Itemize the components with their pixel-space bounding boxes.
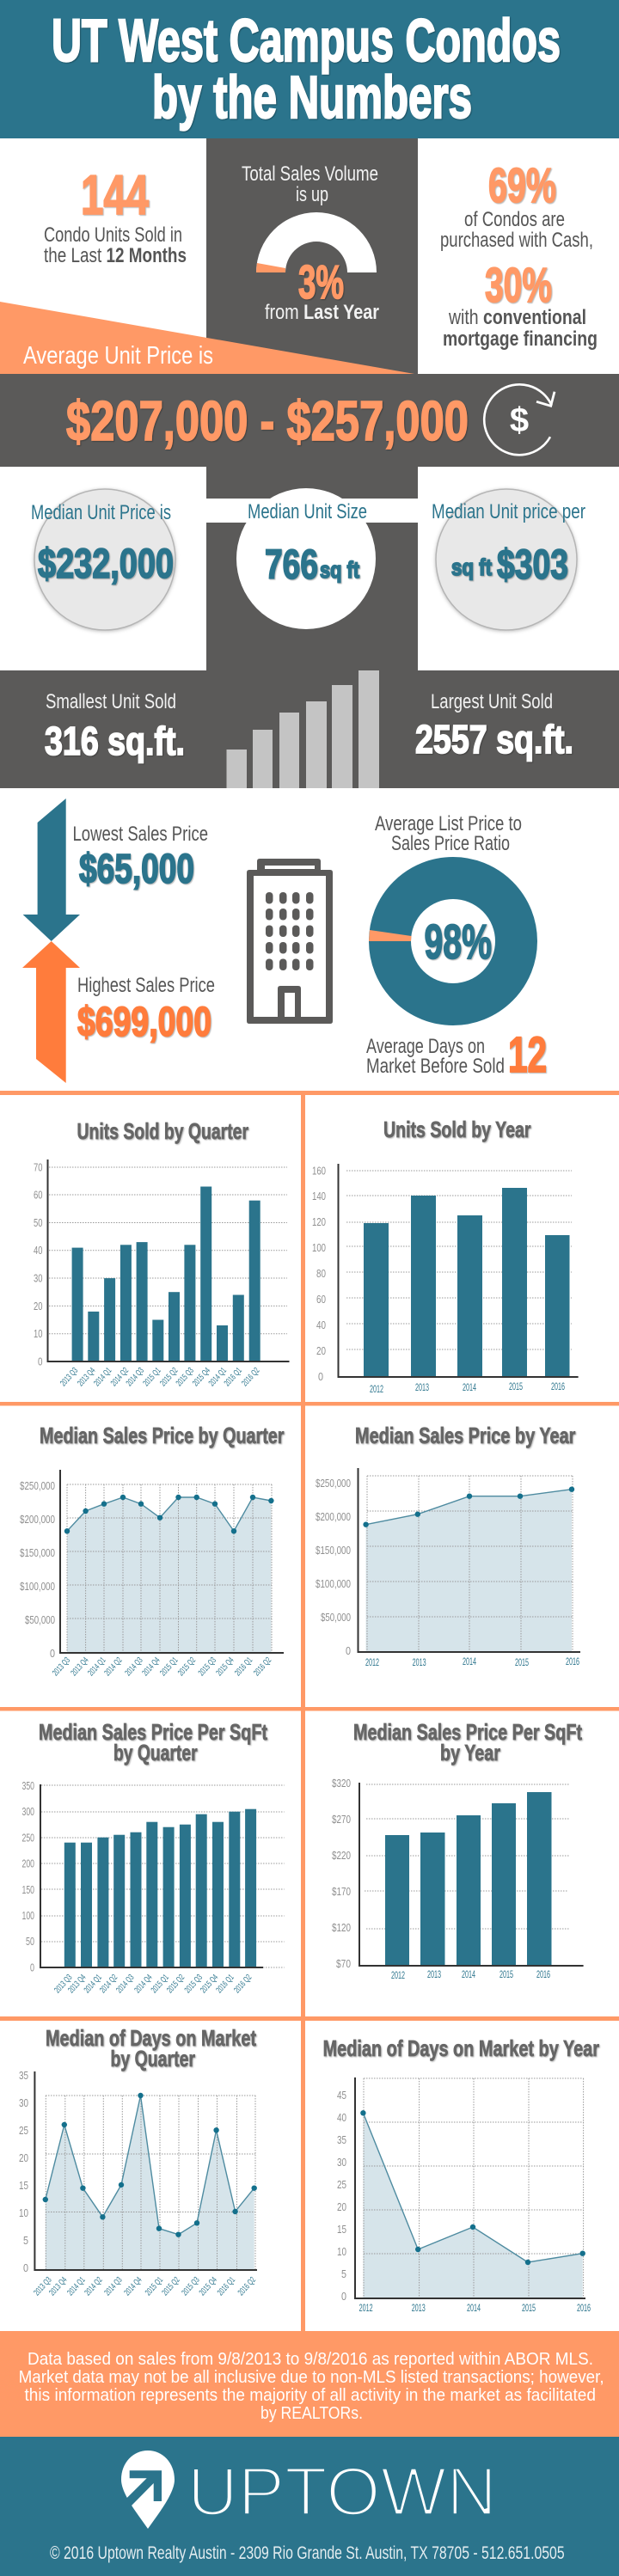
x axis labels: 2012 — [365, 1656, 379, 1668]
panel: smallest and largest unit band: 316 sq.ft. — [45, 719, 185, 763]
y axis labels: 20 — [34, 1300, 43, 1312]
x axis labels: 2014 — [467, 2302, 481, 2314]
x axis labels: 2015 Q1 — [158, 1655, 181, 1678]
x axis labels: 2014 Q1 — [92, 1366, 113, 1388]
x axis labels: 2016 Q1 — [233, 1655, 254, 1678]
x axis labels: 2014 Q4 — [133, 1973, 155, 1995]
x axis labels: 2016 Q1 — [216, 2275, 237, 2298]
y axis labels: 120 — [312, 1215, 326, 1228]
y axis labels: 250 — [22, 1831, 34, 1845]
panel: median unit price — [31, 489, 175, 630]
y axis labels: 100 — [312, 1241, 326, 1254]
y axis labels: 15 — [19, 2179, 28, 2192]
y axis labels: 0 — [30, 1961, 34, 1973]
y axis labels: 40 — [316, 1319, 326, 1331]
x axis labels: 2016 Q2 — [240, 1366, 262, 1388]
chart: median price per sqft by quarter — [22, 1719, 285, 1995]
x axis labels: 2016 — [577, 2302, 591, 2314]
x axis labels: 2013 Q3 — [33, 2275, 54, 2298]
y axis labels: 50 — [34, 1216, 43, 1229]
x axis labels: 2015 Q1 — [144, 2275, 165, 2298]
x axis labels: 2015 Q1 — [150, 1973, 171, 1995]
icon: rising bars — [227, 670, 379, 788]
x axis labels: 2015 — [515, 1656, 529, 1668]
x axis labels: 2013 Q4 — [76, 1366, 98, 1388]
y axis labels: $150,000 — [20, 1546, 55, 1559]
area fill — [366, 1490, 572, 1652]
x axis labels: 2014 Q4 — [123, 2275, 144, 2298]
x axis labels: 2013 — [413, 1656, 426, 1668]
area fill — [363, 2113, 583, 2298]
x axis labels: 2014 Q1 — [83, 1973, 104, 1995]
y axis labels: 0 — [23, 2261, 28, 2274]
y axis labels: 10 — [337, 2245, 346, 2258]
panel: list to sales price ratio: 12 — [508, 1027, 547, 1083]
x axis labels — [51, 1655, 273, 1678]
y axis labels — [337, 2089, 346, 2303]
y axis labels: $250,000 — [316, 1477, 351, 1490]
panel: units sold stat: Condo Units Sold in — [44, 223, 182, 247]
data points — [360, 2110, 585, 2265]
panel: list to sales price ratio: Average Days on — [366, 1035, 485, 1058]
chart title: by Quarter — [110, 2046, 195, 2071]
arrow: highest sales price: $699,000 — [77, 1000, 211, 1045]
panel: total sales volume gauge: 3% — [298, 255, 344, 309]
y axis labels: 10 — [34, 1327, 43, 1340]
x axis labels: 2016 — [551, 1380, 565, 1392]
panel: list to sales price ratio — [366, 812, 547, 1083]
x axis labels: 2015 Q4 — [198, 2275, 219, 2298]
panel: median unit price: $232,000 — [38, 542, 174, 587]
x axis labels: 2014 — [463, 1655, 476, 1667]
arrow: lowest sales price — [23, 798, 208, 941]
chart title: Units Sold by Year — [383, 1117, 531, 1142]
panel: data disclaimer: by REALTORs. — [260, 2403, 363, 2423]
y axis labels — [34, 1160, 43, 1368]
x axis labels — [58, 1366, 262, 1388]
panel: median unit size: sq ft — [320, 557, 359, 583]
y axis labels: $250,000 — [20, 1479, 55, 1492]
chart: median days on market by quarter — [19, 2025, 258, 2298]
x axis labels: 2015 Q2 — [158, 1366, 181, 1388]
panel: cash and mortgage stats: 30% — [485, 258, 552, 313]
y axis labels: $100,000 — [20, 1580, 55, 1593]
x axis labels: 2013 Q3 — [58, 1366, 80, 1388]
x axis labels: 2014 Q2 — [103, 1655, 125, 1678]
y axis labels: $170 — [332, 1885, 351, 1898]
panel: average price band — [0, 374, 619, 467]
y axis labels: 160 — [312, 1164, 326, 1178]
x axis labels: 2014 Q3 — [103, 2275, 125, 2298]
x axis labels — [391, 1968, 550, 1981]
x axis labels: 2013 Q3 — [51, 1655, 72, 1678]
x axis labels: 2015 Q3 — [197, 1655, 218, 1678]
panel: list to sales price ratio: Sales Price Ratio — [391, 832, 510, 855]
chart: median price per sqft by year — [332, 1719, 584, 1981]
y axis labels: 20 — [316, 1344, 326, 1357]
y axis labels: 200 — [22, 1857, 34, 1870]
arrow: highest sales price — [22, 941, 215, 1083]
line — [363, 2113, 583, 2262]
gauge — [256, 212, 377, 272]
x axis labels: 2012 — [370, 1383, 383, 1395]
data points — [43, 2093, 257, 2237]
y axis labels: 25 — [337, 2178, 346, 2191]
panel: median unit size: 766 — [265, 542, 318, 588]
x axis labels: 2014 Q2 — [98, 1973, 120, 1995]
area fill — [67, 1497, 271, 1653]
panel: total sales volume gauge: from Last Year — [265, 301, 379, 324]
line — [67, 1497, 271, 1531]
y axis labels: 5 — [23, 2234, 28, 2247]
logo: uptown pin — [121, 2451, 175, 2529]
x axis labels: 2016 Q2 — [232, 1973, 254, 1995]
x axis labels: 2015 — [499, 1968, 513, 1980]
chart title: Units Sold by Quarter — [77, 1118, 248, 1144]
panel: units sold stat — [44, 163, 187, 267]
y axis labels: 50 — [26, 1935, 34, 1948]
x axis labels — [365, 1655, 579, 1668]
x axis labels: 2013 Q4 — [47, 2275, 70, 2298]
chart title — [39, 1719, 267, 1765]
title — [52, 7, 561, 131]
panel: cash and mortgage stats — [440, 158, 598, 351]
icon: dollar refresh: $ — [510, 401, 529, 439]
x axis labels: 2014 Q1 — [86, 1655, 108, 1678]
orange wedge with average unit price label — [0, 302, 414, 374]
chart: units sold by quarter — [34, 1118, 289, 1388]
y axis labels: $150,000 — [316, 1544, 351, 1557]
panel: smallest and largest unit band: Smallest Unit Sold — [46, 690, 176, 713]
panel: total sales volume gauge — [242, 162, 379, 324]
y axis labels: 20 — [337, 2200, 346, 2213]
y axis labels: 5 — [341, 2267, 346, 2280]
line — [366, 1490, 572, 1525]
y axis labels: $100,000 — [316, 1577, 351, 1590]
x axis labels: 2014 — [462, 1968, 475, 1980]
y axis labels — [332, 1777, 351, 1970]
panel: median unit size — [236, 488, 376, 629]
chart title: by Year — [440, 1740, 500, 1765]
x axis labels: 2014 Q1 — [66, 2275, 88, 2298]
white strip behind median unit size — [206, 499, 418, 523]
chart dividers — [0, 1091, 619, 2331]
panel: median price per sq ft: sq ft — [451, 554, 492, 580]
y axis labels: 0 — [318, 1370, 323, 1383]
x axis labels — [52, 1973, 254, 1995]
x axis labels: 2014 Q3 — [124, 1655, 145, 1678]
y axis labels: $50,000 — [321, 1611, 351, 1624]
y axis labels: 0 — [346, 1644, 351, 1657]
panel: median unit size: Median Unit Size — [248, 500, 367, 523]
panel: smallest and largest unit band — [0, 670, 619, 788]
y axis labels: 35 — [19, 2069, 28, 2082]
x axis labels: 2013 Q4 — [66, 1973, 89, 1995]
bars — [364, 1188, 569, 1376]
x axis labels: 2015 Q4 — [199, 1973, 220, 1995]
x axis labels: 2013 Q3 — [52, 1973, 75, 1995]
panel: cash and mortgage stats: with conventional — [448, 306, 586, 329]
x axis labels: 2014 Q2 — [83, 2275, 105, 2298]
y axis labels: 0 — [341, 2290, 346, 2303]
x axis labels: 2012 — [391, 1969, 405, 1981]
area fill — [46, 2096, 254, 2270]
chart title: Median Sales Price Per SqFt — [39, 1719, 267, 1745]
bars — [72, 1186, 260, 1361]
chart title — [46, 2025, 256, 2071]
panel: total sales volume gauge: Total Sales Volume — [242, 162, 378, 186]
x axis labels: 2013 — [427, 1968, 441, 1980]
panel: list to sales price ratio: 98% — [425, 915, 492, 970]
bars — [64, 1809, 256, 1967]
y axis labels: $200,000 — [20, 1513, 55, 1526]
panel: footer — [0, 2437, 619, 2576]
x axis labels: 2016 Q1 — [215, 1973, 236, 1995]
y axis labels: 40 — [34, 1244, 43, 1257]
x axis labels: 2015 Q3 — [183, 1973, 205, 1995]
x axis labels: 2015 Q1 — [142, 1366, 163, 1388]
y axis labels: 30 — [34, 1272, 43, 1284]
y axis labels: 100 — [22, 1909, 34, 1922]
x axis labels: 2015 Q4 — [191, 1366, 212, 1388]
y axis labels: $70 — [336, 1957, 351, 1970]
x axis labels: 2015 — [509, 1380, 523, 1392]
y axis labels: 30 — [337, 2156, 346, 2169]
panel: median price per sq ft: $303 — [497, 542, 568, 588]
panel: list to sales price ratio: Average List Price to — [375, 812, 522, 835]
y axis labels: 150 — [22, 1883, 34, 1896]
y axis labels: 40 — [337, 2111, 346, 2124]
y axis labels: 35 — [337, 2133, 346, 2146]
panel: median price per sq ft — [432, 489, 585, 630]
data points — [64, 1495, 274, 1534]
y axis labels: 60 — [316, 1293, 326, 1306]
y axis labels: 0 — [38, 1355, 43, 1368]
y axis labels: 350 — [22, 1779, 34, 1792]
title: by the Numbers — [152, 64, 472, 131]
x axis labels: 2015 Q3 — [181, 2275, 202, 2298]
y axis labels — [312, 1164, 326, 1383]
panel: units sold stat: 144 — [81, 163, 149, 226]
y axis labels: $220 — [332, 1849, 351, 1862]
x axis labels: 2014 Q4 — [141, 1655, 162, 1678]
y axis labels: 20 — [19, 2151, 28, 2164]
y axis labels: $270 — [332, 1813, 351, 1826]
y axis labels: 140 — [312, 1190, 326, 1202]
chart title — [353, 1719, 582, 1765]
arrow: lowest sales price: $65,000 — [79, 847, 194, 892]
y axis labels: 70 — [34, 1160, 43, 1174]
y axis labels — [19, 2069, 28, 2274]
panel: cash and mortgage stats: 69% — [488, 158, 556, 213]
x axis labels: 2015 Q2 — [165, 1973, 187, 1995]
y axis labels: 15 — [337, 2223, 346, 2236]
donut chart — [369, 878, 516, 1004]
x axis labels: 2015 — [522, 2302, 536, 2314]
header banner with title — [0, 0, 619, 138]
y axis labels: 60 — [34, 1188, 43, 1202]
orange wedge with average unit price label: Average Unit Price is — [23, 342, 213, 370]
chart: units sold by year — [312, 1117, 579, 1395]
x axis labels: 2016 Q1 — [223, 1366, 244, 1388]
y axis labels: 0 — [50, 1647, 55, 1660]
x axis labels — [370, 1380, 565, 1395]
y axis labels — [22, 1779, 34, 1973]
y axis labels: $200,000 — [316, 1510, 351, 1523]
x axis labels: 2015 Q2 — [176, 1655, 198, 1678]
y axis labels: 30 — [19, 2096, 28, 2109]
x axis labels: 2014 Q2 — [109, 1366, 131, 1388]
panel: center grey column — [206, 138, 418, 671]
y axis labels: 300 — [22, 1805, 34, 1818]
panel: smallest and largest unit band: Largest Unit Sold — [431, 690, 553, 713]
panel: total sales volume gauge: is up — [296, 183, 328, 206]
x axis labels: 2013 Q4 — [70, 1655, 91, 1678]
x axis labels: 2014 Q1 — [207, 1366, 229, 1388]
icon: dollar refresh — [484, 384, 555, 455]
x axis labels: 2012 — [359, 2302, 373, 2314]
y axis labels: 80 — [316, 1267, 326, 1280]
chart title: by Quarter — [113, 1740, 198, 1765]
bars — [385, 1792, 552, 1965]
x axis labels: 2013 — [415, 1381, 429, 1393]
line — [46, 2096, 254, 2235]
x axis labels — [359, 2302, 591, 2314]
y axis labels: $320 — [332, 1777, 351, 1790]
chart title: Median of Days on Market — [46, 2025, 256, 2051]
x axis labels: 2014 Q3 — [125, 1366, 146, 1388]
y axis labels: $120 — [332, 1921, 351, 1934]
icon: condo building — [247, 859, 333, 1024]
panel: smallest and largest unit band: 2557 sq.ft. — [415, 717, 573, 762]
chart title: Median Sales Price by Quarter — [40, 1423, 284, 1448]
y axis labels — [20, 1479, 55, 1660]
y axis labels — [316, 1477, 351, 1657]
x axis labels: 2015 Q3 — [175, 1366, 196, 1388]
panel: units sold stat: the Last 12 Months — [44, 244, 187, 267]
y axis labels: 25 — [19, 2124, 28, 2137]
y axis labels: $50,000 — [25, 1613, 55, 1626]
x axis labels: 2016 — [536, 1968, 550, 1980]
x axis labels: 2016 Q2 — [252, 1655, 273, 1678]
panel: list to sales price ratio: Market Before Sold — [366, 1055, 505, 1078]
y axis labels: 10 — [19, 2206, 28, 2219]
logo wordmark: UPTOWN — [187, 2453, 497, 2530]
arrow: highest sales price: Highest Sales Price — [77, 974, 215, 997]
chart: median days on market by year — [323, 2035, 599, 2314]
x axis labels: 2016 — [566, 1655, 579, 1667]
x axis labels: 2015 Q2 — [161, 2275, 182, 2298]
y axis labels: 45 — [337, 2089, 346, 2102]
x axis labels: 2014 Q3 — [114, 1973, 137, 1995]
chart: median sales price by year — [316, 1423, 580, 1668]
chart: median sales price by quarter — [20, 1423, 284, 1678]
panel: median unit price: Median Unit Price is — [31, 501, 171, 524]
arrow: lowest sales price: Lowest Sales Price — [72, 823, 208, 846]
x axis labels: 2016 Q2 — [236, 2275, 258, 2298]
panel: cash and mortgage stats: of Condos are — [464, 208, 565, 231]
x axis labels: 2013 — [412, 2302, 426, 2314]
x axis labels: 2015 Q4 — [215, 1655, 236, 1678]
data points — [363, 1487, 574, 1527]
x axis labels — [33, 2275, 258, 2298]
panel: average price band: $207,000 - $257,000 — [66, 389, 469, 452]
panel: data disclaimer — [0, 2331, 619, 2437]
x axis labels: 2014 — [463, 1381, 476, 1393]
